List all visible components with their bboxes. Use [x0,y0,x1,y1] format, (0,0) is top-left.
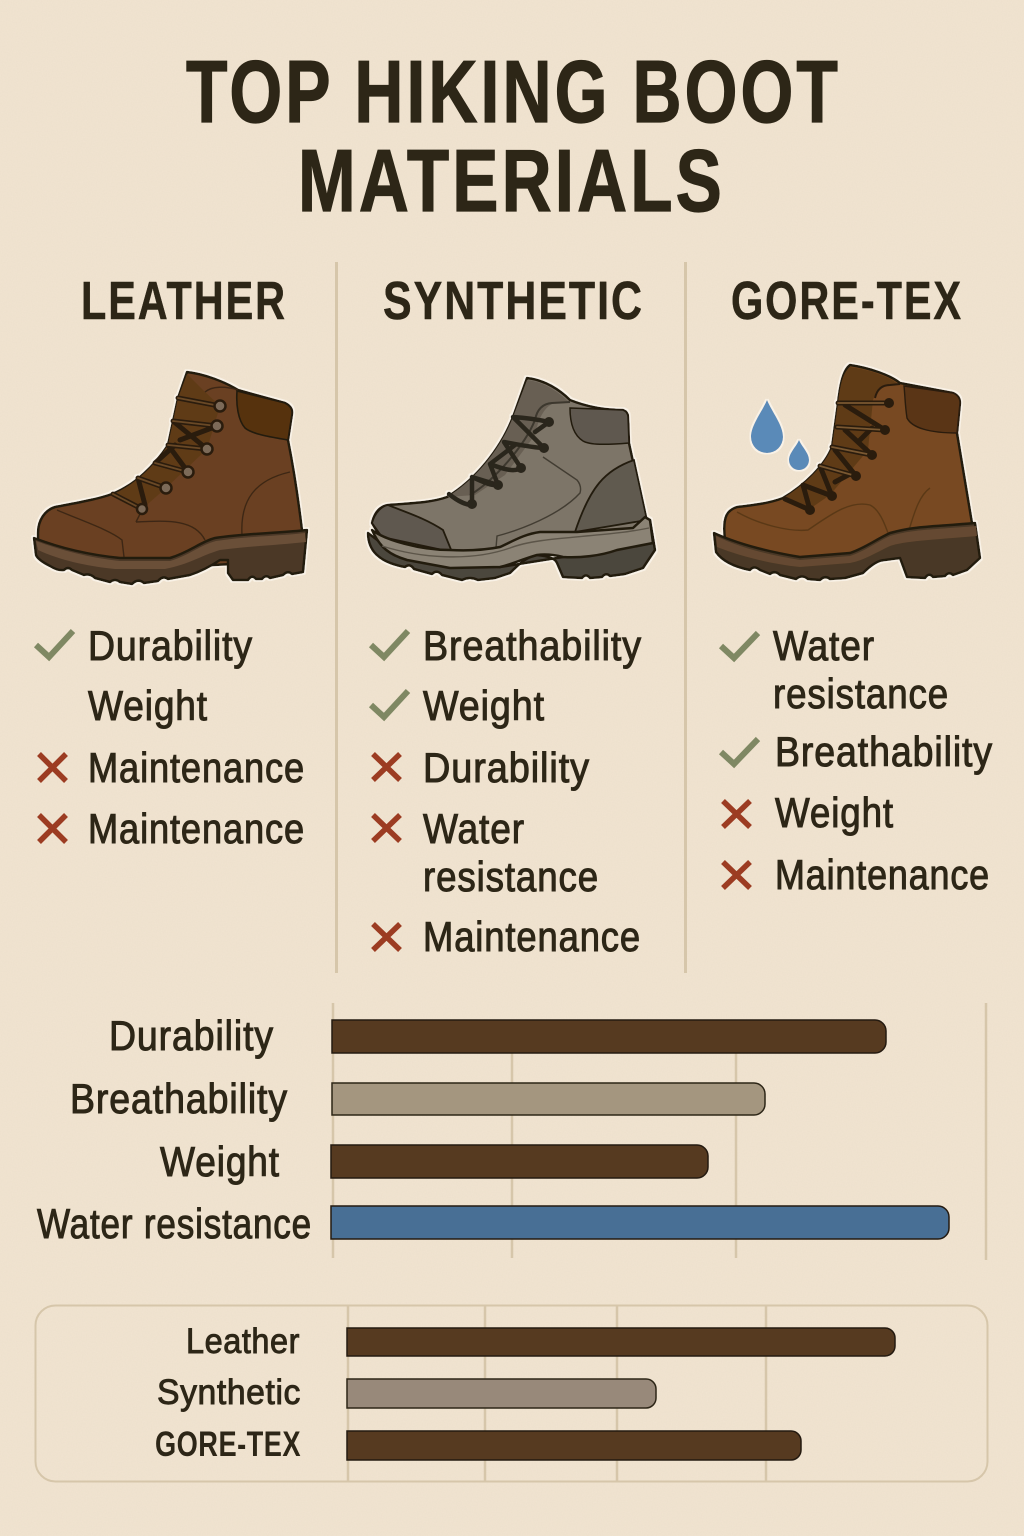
item: weight: Weight [88,682,208,729]
heading: synthetic: SYNTHETIC [383,271,644,331]
item: water resistance con: resistance [423,853,599,900]
bar: leather [186,1322,895,1361]
boot illustration: gore-tex [714,365,980,580]
item: breathability pro: Breathability [775,728,993,775]
item: water resistance con: Water [423,805,525,852]
boot illustration: synthetic [368,378,655,580]
item: durability con: Durability [423,744,590,791]
bar: durability [109,1012,886,1059]
item: durability pro [36,622,253,669]
item: breathability pro: Breathability [423,622,642,669]
panel: gore-tex [714,271,993,898]
item: maintenance con repeated: Maintenance [88,805,305,852]
item: water resistance pro: Water [773,622,875,669]
heading: gore-tex: GORE-TEX [731,271,963,331]
item: durability pro: Durability [88,622,253,669]
item: maintenance con: Maintenance [88,744,305,791]
bar: weight [160,1138,708,1185]
item: weight con [723,789,894,836]
bar chart: attributes [37,1003,986,1260]
bar: synthetic [157,1373,656,1412]
item: water resistance pro: resistance [773,670,949,717]
laces [449,417,554,509]
item: weight con: Weight [775,789,894,836]
item: water resistance con [373,805,599,900]
bar chart: materials panel [36,1306,988,1482]
bar: gore-tex [155,1425,801,1464]
panel: synthetic [368,271,655,960]
item: weight pro [371,682,545,729]
bar: leather: Leather [186,1322,300,1361]
laces [113,398,226,514]
item: water resistance pro [721,622,949,717]
bar: weight: Weight [160,1138,280,1185]
title: MATERIALS [298,131,725,230]
pros and cons: leather [36,622,305,852]
item: maintenance con: Maintenance [775,851,990,898]
pros and cons: synthetic [371,622,642,960]
heading: leather: LEATHER [81,271,287,331]
bar: durability: Durability [109,1012,274,1059]
panel: leather [34,271,307,852]
title [186,42,841,230]
bar: synthetic: Synthetic [157,1373,301,1412]
title: TOP HIKING BOOT [186,42,841,141]
pros and cons: gore-tex [721,622,993,898]
bar: water resistance: Water resistance [37,1200,312,1247]
bar: breathability: Breathability [70,1075,288,1122]
column dividers [335,262,687,973]
item: weight pro: Weight [423,682,545,729]
item: maintenance con: Maintenance [423,913,641,960]
bar: gore-tex: GORE-TEX [155,1425,301,1464]
bar: breathability [70,1075,765,1122]
laces [785,398,894,515]
icon: water drops [751,400,809,470]
bar: water resistance [37,1200,949,1247]
boot illustration: leather [34,372,307,584]
